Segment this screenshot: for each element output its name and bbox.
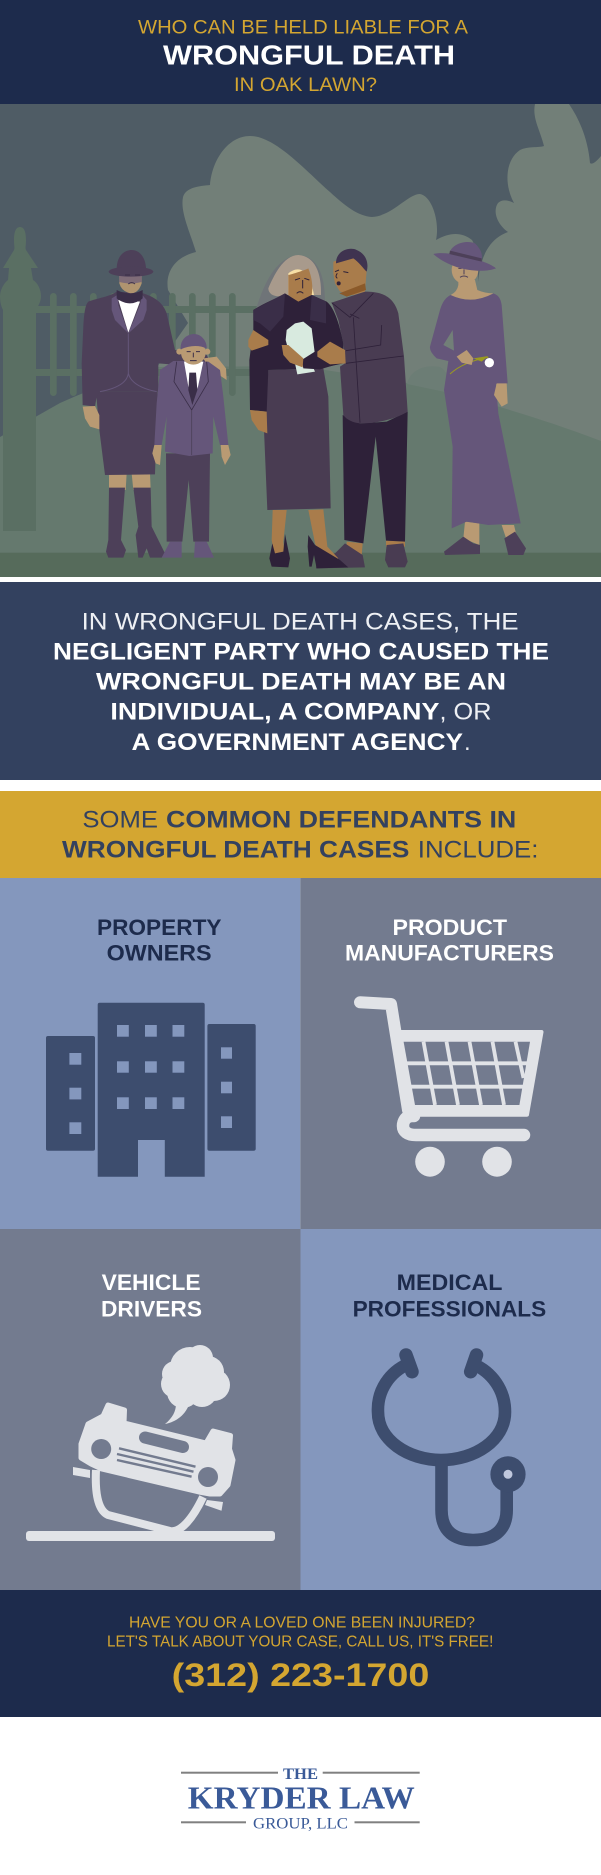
hill [0, 366, 601, 577]
label: medical professionals [353, 1270, 546, 1322]
label: product manufacturers [345, 915, 554, 966]
label: medical professionals: MEDICAL [397, 1270, 503, 1295]
statement text: , OR [440, 699, 492, 726]
label: property owners [97, 915, 222, 966]
call to action text: HAVE YOU OR A LOVED ONE BEEN INJURED? [129, 1614, 475, 1631]
statement text: NEGLIGENT PARTY WHO CAUSED THE [53, 638, 549, 665]
label: medical professionals: PROFESSIONALS [353, 1297, 546, 1322]
figures on the left [82, 250, 231, 558]
figure: woman in long dress with flower [430, 242, 526, 555]
title: line one: WHO CAN BE HELD LIABLE FOR A [138, 18, 468, 38]
logo: the Kryder Law Group [181, 1766, 420, 1832]
logo: the Kryder Law Group: THE [283, 1766, 318, 1783]
label: product manufacturers: MANUFACTURERS [345, 941, 554, 966]
label: property owners: OWNERS [107, 941, 212, 966]
heading text: COMMON DEFENDANTS IN [166, 806, 516, 833]
statement text: IN WRONGFUL DEATH CASES, THE [82, 608, 519, 635]
panel: property owners [0, 878, 300, 1229]
label: vehicle drivers: DRIVERS [101, 1297, 202, 1322]
title: location: IN OAK LAWN? [234, 75, 377, 96]
heading text: INCLUDE: [418, 836, 538, 863]
statement text: . [464, 729, 471, 756]
heading text: WRONGFUL DEATH CASES [62, 836, 409, 863]
panel: product manufacturers [300, 878, 601, 1229]
icon: shopping cart [360, 1002, 542, 1177]
ground strip [0, 553, 601, 577]
logo: the Kryder Law Group: GROUP, LLC [253, 1815, 348, 1832]
title: wrongful death: WRONGFUL DEATH [163, 39, 455, 70]
hill bump [407, 366, 448, 392]
figure: older woman holding urn [248, 255, 348, 568]
icon: stethoscope [378, 1355, 526, 1540]
fence post [0, 227, 41, 531]
title banner [0, 0, 601, 104]
statement text [53, 608, 549, 756]
label: vehicle drivers [101, 1270, 202, 1322]
statement text: INDIVIDUAL, A COMPANY [110, 699, 439, 726]
icon: overturned car with smoke [26, 1345, 275, 1541]
logo: the Kryder Law Group: KRYDER LAW [188, 1779, 415, 1815]
panel: common defendants heading [0, 791, 601, 878]
bushes [150, 104, 601, 470]
figure: man with dark trousers [316, 249, 408, 568]
label: vehicle drivers: VEHICLE [102, 1270, 201, 1295]
call to action text [107, 1614, 493, 1650]
statement text: A GOVERNMENT AGENCY [132, 729, 463, 756]
figure: boy in suit [152, 334, 231, 558]
cemetery fence [34, 293, 260, 396]
phone number: (312) 223-1700 [172, 1657, 429, 1693]
figures on the right [248, 242, 526, 568]
panel: vehicle drivers [0, 1229, 300, 1590]
label: property owners: PROPERTY [97, 915, 222, 940]
figure: woman in suit [82, 250, 227, 558]
heading text [62, 806, 538, 863]
label: product manufacturers: PRODUCT [392, 915, 508, 940]
illustration: mourners at a cemetery [0, 104, 601, 577]
heading text: SOME [82, 806, 158, 833]
panel: medical professionals [300, 1229, 601, 1590]
panel: negligent party statement [0, 582, 601, 780]
icon: office buildings [46, 1003, 256, 1177]
panel: call to action [0, 1590, 601, 1717]
statement text: WRONGFUL DEATH MAY BE AN [96, 668, 506, 695]
call to action text: LET'S TALK ABOUT YOUR CASE, CALL US, IT'S FREE! [107, 1633, 493, 1650]
smoke cloud [161, 1345, 230, 1424]
